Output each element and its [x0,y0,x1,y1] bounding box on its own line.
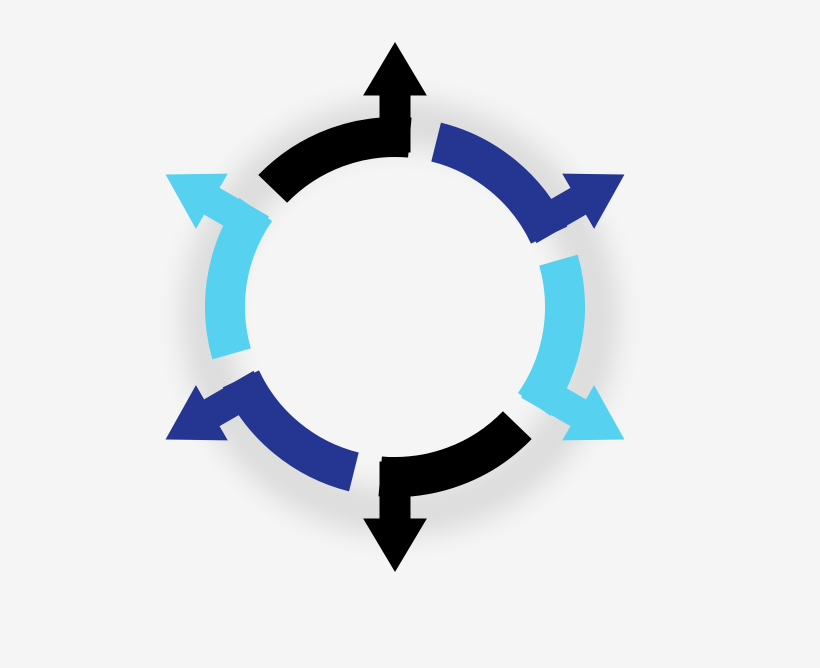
segment: upper left light blue arrow [105,148,308,354]
ring segments [105,43,685,571]
segment: lower left dark blue arrow [151,339,354,545]
segment: bottom black arrow [364,425,517,571]
shadow [205,123,595,513]
segment: upper right dark blue arrow [436,69,639,275]
segment: lower right light blue arrow [482,260,685,466]
segment: top black arrow [273,43,426,189]
